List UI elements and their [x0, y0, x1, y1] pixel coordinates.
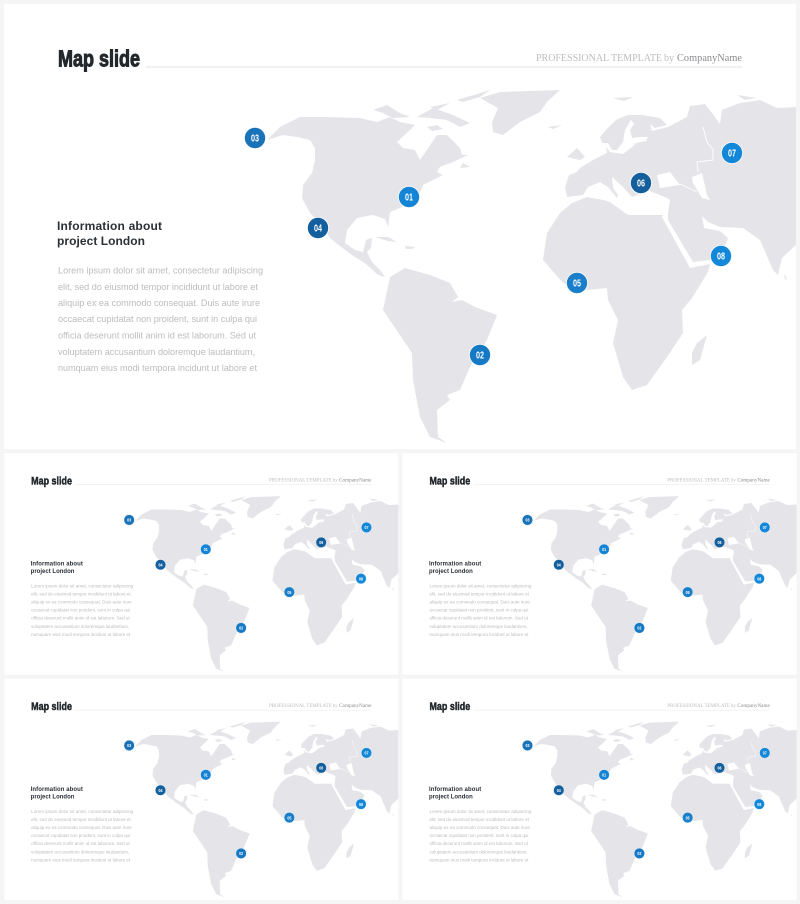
thumbnail body text: voluptatem accusantium doloremque laudantium, [31, 624, 129, 629]
thumbnail markers: 03 [127, 743, 131, 749]
thumbnail markers: 07 [763, 751, 767, 757]
thumbnail markers: 03 [127, 518, 131, 524]
thumbnail markers: 08 [757, 576, 761, 582]
thumbnail markers: 02 [239, 851, 243, 857]
body text [58, 266, 263, 373]
thumbnail world map [135, 722, 399, 897]
thumbnail tagline [269, 703, 372, 709]
map markers: 02 [476, 351, 484, 362]
thumbnail heading [429, 787, 481, 801]
panel: thumbnail top left [4, 453, 399, 675]
thumbnail body text: occaecat cupidatat non proident, sunt in culpa qui [429, 608, 528, 613]
thumbnail body text: occaecat cupidatat non proident, sunt in culpa qui [31, 833, 130, 838]
thumbnail body text: numquam eius modi tempora incidunt ut labore et [429, 632, 529, 637]
thumbnail markers: 03 [525, 518, 530, 524]
thumbnail body text: elit, sed do eiusmod tempor incididunt ut labore et [429, 817, 530, 822]
thumbnail markers: 06 [718, 766, 722, 772]
thumbnail body text: occaecat cupidatat non proident, sunt in culpa qui [429, 833, 528, 838]
thumbnail tagline [667, 703, 770, 709]
thumbnail markers: 01 [204, 547, 208, 553]
thumbnail markers [124, 515, 372, 633]
thumbnail body text: numquam eius modi tempora incidunt ut labore et [429, 857, 529, 862]
thumbnail markers: 06 [319, 766, 323, 772]
thumbnail markers [124, 740, 372, 859]
thumbnail heading: project London [429, 569, 473, 575]
thumbnail tagline: PROFESSIONAL TEMPLATE [667, 479, 730, 484]
thumbnail title: Map slide [429, 701, 470, 713]
thumbnail body text: Lorem ipsum dolor sit amet, consectetur adipiscing [429, 809, 532, 814]
thumbnail heading [31, 787, 83, 801]
thumbnail body text: Lorem ipsum dolor sit amet, consectetur adipiscing [429, 583, 532, 588]
header tagline: PROFESSIONAL TEMPLATE [536, 53, 662, 64]
title: Map slide [58, 46, 140, 72]
thumbnail markers: 08 [359, 802, 363, 808]
thumbnail markers: 01 [204, 773, 208, 779]
map markers: 04 [314, 224, 322, 235]
info heading: project London [57, 234, 145, 248]
panel: thumbnail top right [403, 453, 797, 675]
thumbnail heading [429, 562, 481, 575]
body text: officia deserunt mollit anim id est laborum. Sed ut [58, 330, 256, 340]
thumbnail tagline: CompanyName [339, 478, 372, 484]
thumbnail markers: 08 [757, 802, 761, 808]
body text: elit, sed do eiusmod tempor incididunt ut labore et [58, 282, 258, 292]
map markers: 03 [251, 134, 259, 145]
thumbnail tagline [667, 478, 770, 484]
thumbnail tagline: PROFESSIONAL TEMPLATE [269, 704, 332, 709]
world map [267, 90, 797, 443]
header rule [146, 66, 742, 68]
thumbnail body text: aliquip ex ea commodo consequat. Duis aute irure [31, 825, 132, 830]
panel: main slide [4, 4, 797, 449]
map markers: 07 [728, 149, 736, 160]
thumbnail body text: elit, sed do eiusmod tempor incididunt ut labore et [31, 817, 131, 822]
thumbnail markers: 07 [763, 525, 767, 531]
thumbnail title: Map slide [31, 701, 72, 713]
thumbnail tagline: PROFESSIONAL TEMPLATE [269, 479, 332, 484]
thumbnail body text: occaecat cupidatat non proident, sunt in culpa qui [31, 608, 130, 613]
thumbnail tagline: by [333, 479, 338, 484]
map markers: 01 [405, 193, 413, 204]
body text: numquam eius modi tempora incidunt ut labore et [58, 363, 257, 373]
thumbnail heading: project London [31, 569, 75, 575]
map markers [244, 127, 743, 366]
thumbnail world map [135, 496, 399, 672]
thumbnail body text: aliquip ex ea commodo consequat. Duis aute irure [429, 600, 530, 605]
thumbnail body text: officia deserunt mollit anim id est laborum. Sed ut [31, 616, 130, 621]
map markers: 06 [637, 179, 645, 190]
thumbnail world map [533, 722, 797, 897]
thumbnail markers: 04 [159, 788, 163, 794]
thumbnail body text: officia deserunt mollit anim id est laborum. Sed ut [429, 841, 529, 846]
thumbnail markers: 04 [557, 563, 561, 569]
thumbnail tagline: by [731, 704, 736, 709]
thumbnail body text: voluptatem accusantium doloremque laudantium, [429, 624, 527, 629]
thumbnail markers: 03 [525, 743, 530, 749]
thumbnail body text: officia deserunt mollit anim id est laborum. Sed ut [31, 841, 130, 846]
thumbnail markers: 05 [287, 815, 292, 821]
thumbnail heading: Information about [429, 562, 481, 568]
thumbnail markers: 02 [637, 626, 642, 632]
body text: Lorem ipsum dolor sit amet, consectetur adipiscing [58, 266, 263, 276]
thumbnail tagline [269, 478, 372, 484]
thumbnail markers [522, 740, 770, 859]
thumbnail markers: 05 [686, 815, 690, 821]
thumbnail tagline: CompanyName [737, 703, 770, 709]
thumbnail heading: Information about [31, 787, 83, 793]
thumbnail body text: elit, sed do eiusmod tempor incididunt ut labore et [31, 591, 131, 596]
map markers: 05 [573, 279, 581, 290]
body text: voluptatem accusantium doloremque laudantium, [58, 347, 255, 357]
header tagline: by [664, 53, 674, 64]
thumbnail heading: project London [429, 795, 473, 801]
map markers: 08 [717, 252, 725, 263]
thumbnail markers: 08 [359, 576, 363, 582]
thumbnail markers: 04 [159, 563, 163, 569]
thumbnail title: Map slide [31, 475, 72, 487]
thumbnail markers: 01 [602, 547, 606, 553]
thumbnail body text: voluptatem accusantium doloremque laudantium, [31, 849, 129, 854]
thumbnail body text: aliquip ex ea commodo consequat. Duis aute irure [31, 600, 132, 605]
thumbnail body text: numquam eius modi tempora incidunt ut labore et [31, 632, 131, 637]
thumbnail body text: officia deserunt mollit anim id est laborum. Sed ut [429, 616, 529, 621]
thumbnail world map [533, 496, 797, 672]
header tagline [536, 53, 742, 64]
thumbnail body text [429, 583, 532, 637]
thumbnail tagline: by [333, 704, 338, 709]
panel: thumbnail bottom right [403, 679, 797, 900]
thumbnail markers: 06 [718, 540, 722, 546]
thumbnail body text: Lorem ipsum dolor sit amet, consectetur adipiscing [31, 809, 134, 814]
thumbnail heading: project London [31, 795, 75, 801]
thumbnail heading: Information about [31, 562, 83, 568]
thumbnail tagline: by [731, 479, 736, 484]
thumbnail markers: 05 [686, 590, 690, 596]
thumbnail title: Map slide [429, 475, 470, 487]
thumbnail tagline: PROFESSIONAL TEMPLATE [667, 704, 730, 709]
thumbnail body text: Lorem ipsum dolor sit amet, consectetur adipiscing [31, 583, 134, 588]
info heading [57, 219, 162, 248]
thumbnail heading: Information about [429, 787, 481, 793]
thumbnail heading [31, 562, 83, 575]
thumbnail tagline: CompanyName [737, 478, 770, 484]
thumbnail markers: 01 [602, 773, 606, 779]
thumbnail tagline: CompanyName [339, 703, 372, 709]
panel: thumbnail bottom left [4, 679, 399, 900]
thumbnail body text [429, 809, 532, 862]
body text: aliquip ex ea commodo consequat. Duis aute irure [58, 298, 260, 308]
thumbnail markers: 05 [287, 590, 292, 596]
thumbnail markers: 07 [364, 751, 369, 757]
body text: occaecat cupidatat non proident, sunt in culpa qui [58, 314, 257, 324]
thumbnail body text: voluptatem accusantium doloremque laudantium, [429, 849, 527, 854]
thumbnail markers: 04 [557, 788, 561, 794]
thumbnail markers: 07 [364, 525, 369, 531]
thumbnail markers: 02 [637, 851, 642, 857]
thumbnail markers: 06 [319, 540, 323, 546]
thumbnail body text: elit, sed do eiusmod tempor incididunt ut labore et [429, 591, 530, 596]
thumbnail markers: 02 [239, 626, 243, 632]
thumbnail body text: aliquip ex ea commodo consequat. Duis aute irure [429, 825, 530, 830]
thumbnail body text [31, 809, 134, 862]
thumbnail body text: numquam eius modi tempora incidunt ut labore et [31, 857, 131, 862]
thumbnail markers [522, 515, 770, 633]
thumbnail body text [31, 583, 134, 637]
info heading: Information about [57, 219, 162, 233]
header tagline: CompanyName [677, 53, 742, 64]
